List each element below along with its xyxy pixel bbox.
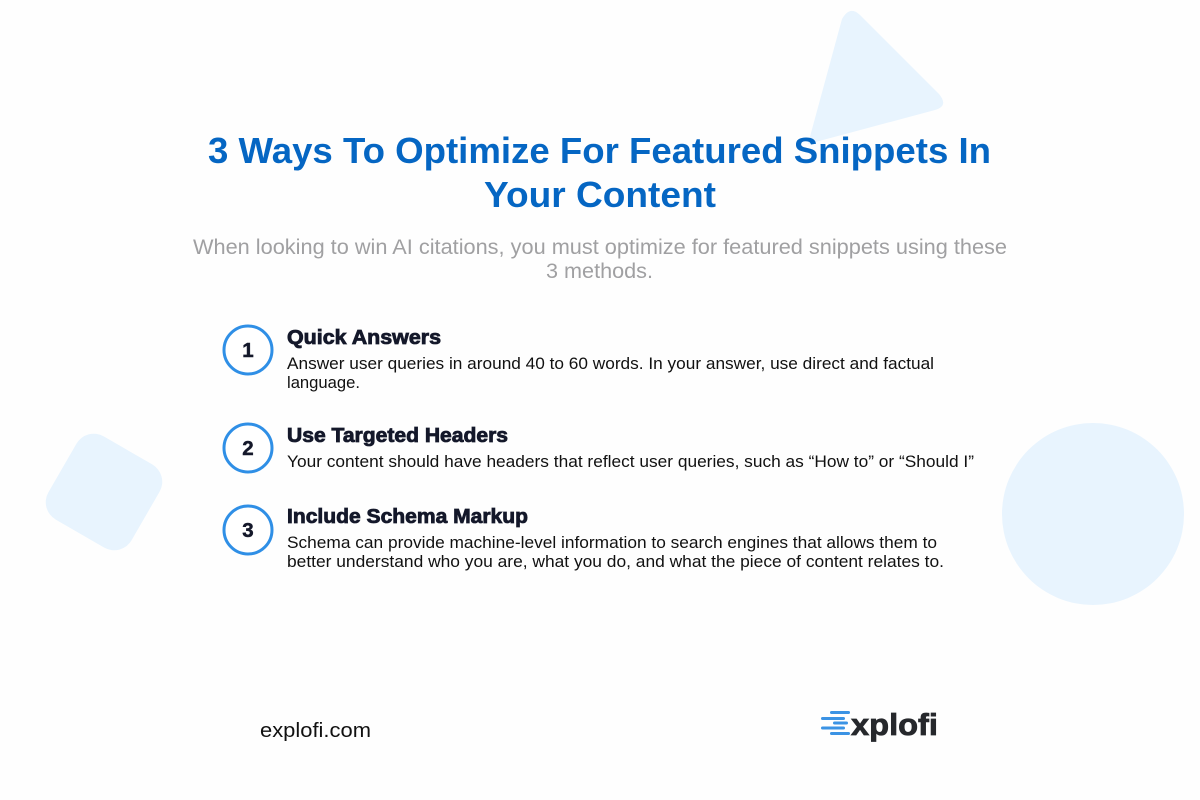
heading 1: Quick Answers bbox=[287, 327, 441, 349]
decorative circle bbox=[1002, 423, 1184, 605]
body 3: Schema can provide machine-level information to search engines that allows them to bbox=[287, 533, 937, 552]
number badge 1: 1 bbox=[242, 339, 254, 362]
subtitle: When looking to win AI citations, you must optimize for featured snippets using these bbox=[193, 235, 1007, 259]
body 1 bbox=[287, 354, 934, 392]
title: 3 Ways To Optimize For Featured Snippets In bbox=[208, 130, 991, 171]
website url: explofi.com bbox=[260, 719, 371, 742]
body 3: better understand who you are, what you do, and what the piece of content relates to. bbox=[287, 552, 944, 571]
decorative rounded square bbox=[38, 426, 170, 558]
title: Your Content bbox=[484, 174, 716, 215]
body 1: Answer user queries in around 40 to 60 words. In your answer, use direct and factual bbox=[287, 354, 934, 373]
heading 2: Use Targeted Headers bbox=[287, 425, 508, 447]
body 3 bbox=[287, 533, 944, 571]
logo wordmark: xplofi bbox=[851, 707, 938, 742]
heading 3: Include Schema Markup bbox=[287, 506, 528, 528]
subtitle bbox=[193, 235, 1007, 283]
number badge 3: 3 bbox=[242, 519, 254, 542]
number badge 2 bbox=[224, 424, 272, 472]
number badge 3 bbox=[224, 506, 272, 554]
decorative triangle bbox=[808, 11, 943, 144]
item 2: use targeted headers bbox=[224, 424, 974, 472]
body 1: language. bbox=[287, 373, 360, 392]
body 2: Your content should have headers that reflect user queries, such as “How to” or “Should I” bbox=[287, 452, 974, 471]
number badge 1 bbox=[224, 326, 272, 374]
subtitle: 3 methods. bbox=[546, 259, 653, 283]
logo: explofi bbox=[821, 707, 938, 742]
logo icon: speed lines bbox=[821, 711, 850, 735]
item 3: include schema markup bbox=[224, 506, 944, 571]
title bbox=[208, 130, 991, 215]
item 1: quick answers bbox=[224, 326, 934, 392]
number badge 2: 2 bbox=[242, 437, 254, 460]
